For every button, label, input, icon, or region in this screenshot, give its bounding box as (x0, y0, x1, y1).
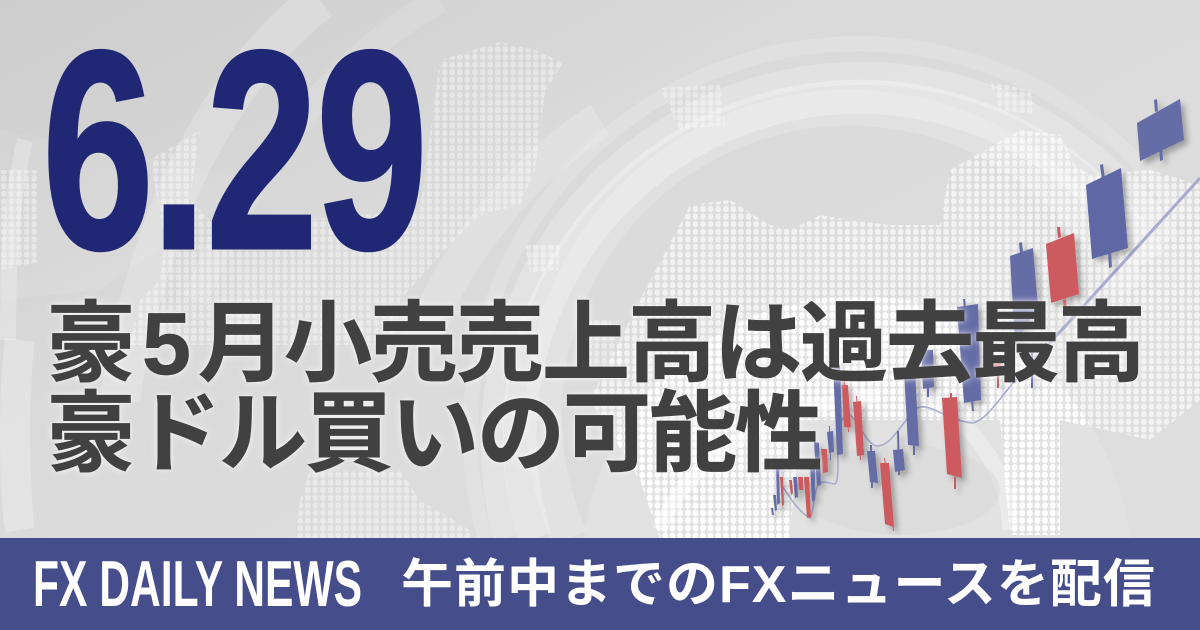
red candles (780, 227, 1079, 531)
date: 6.29: 6 (42, 0, 154, 308)
blue candles (771, 99, 1184, 515)
date: 6.29: . (151, 0, 207, 308)
footer band (0, 538, 1200, 630)
footer tagline: 午前中までのFXニュースを配信 (401, 556, 1156, 614)
date: 6.29: 9 (316, 0, 428, 308)
date: 6.29: 2 (206, 0, 318, 308)
title line 2: 豪ドル買いの可能性 (47, 384, 821, 483)
title line 1: 豪5月小売売上高は過去最高 (47, 294, 1144, 393)
trend line (783, 178, 1200, 518)
